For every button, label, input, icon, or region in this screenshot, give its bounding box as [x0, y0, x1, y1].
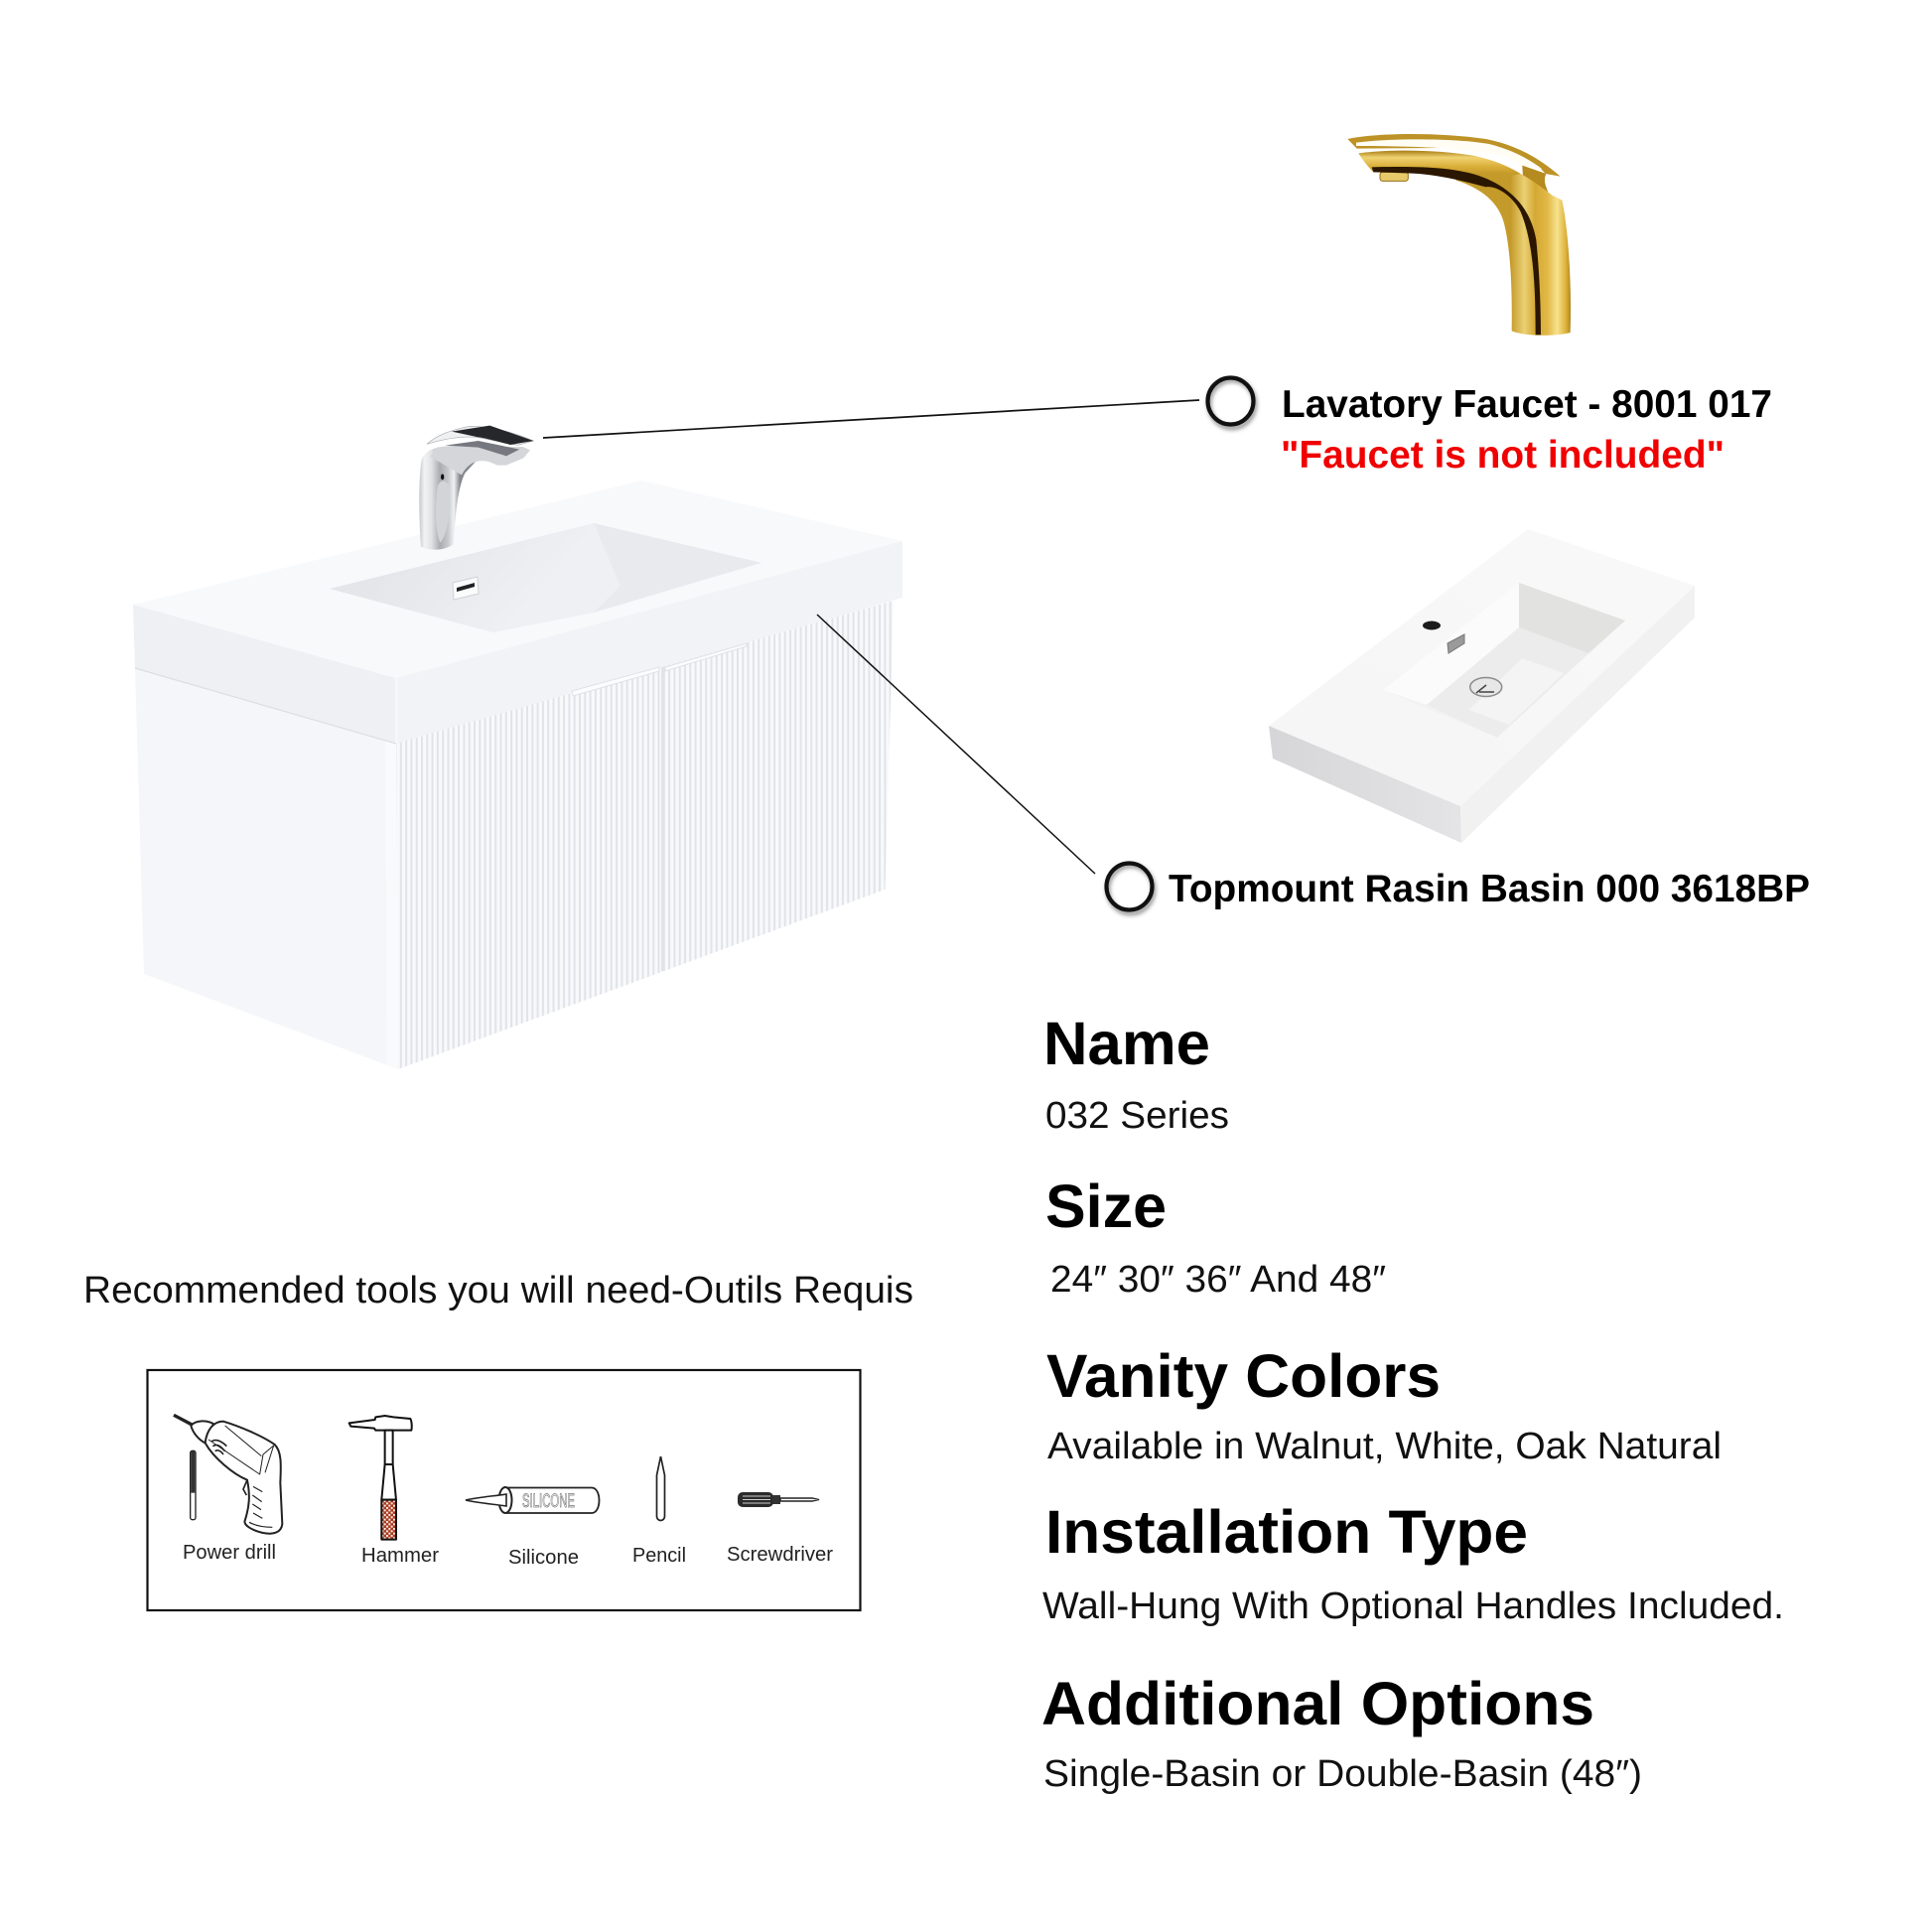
heading: installation type: Installation Type	[1045, 1498, 1528, 1566]
heading: vanity colors: Vanity Colors	[1046, 1342, 1441, 1410]
basin top overflow	[1448, 634, 1464, 653]
basin top product image	[1269, 529, 1695, 843]
tool: hammer	[349, 1416, 412, 1540]
silicone tube label: SILICONE	[522, 1491, 575, 1512]
vanity cabinet with basin top	[133, 481, 902, 1069]
countertop front face	[396, 541, 902, 744]
text: name value: 032 Series	[1045, 1094, 1229, 1137]
heading: name: Name	[1043, 1010, 1210, 1077]
cabinet ribbed drawer front	[396, 601, 894, 1069]
basin top surface	[1269, 529, 1695, 806]
gold faucet handle	[1347, 134, 1561, 177]
drawer pull handles	[572, 643, 747, 696]
basin top right edge	[1460, 586, 1695, 843]
tool label: silicone: Silicone	[508, 1547, 579, 1569]
label: lavatory faucet: Lavatory Faucet - 8001 017	[1282, 383, 1772, 426]
gold faucet column	[1456, 157, 1571, 336]
tool: silicone tube	[466, 1487, 600, 1513]
drill bit	[191, 1450, 196, 1520]
basin bowl	[330, 523, 761, 632]
basin top faucet hole	[1423, 621, 1441, 629]
cabinet side panel	[135, 668, 398, 1069]
heading: recommended tools: Recommended tools you will need-Outils Requis	[83, 1269, 913, 1311]
basin top left edge	[1269, 726, 1461, 843]
label: topmount basin: Topmount Rasin Basin 000 3618BP	[1169, 868, 1810, 910]
gold faucet spout	[1358, 151, 1521, 181]
panel: tools	[147, 1370, 860, 1610]
basin top bowl	[1383, 583, 1625, 738]
tool label: hammer: Hammer	[361, 1545, 439, 1567]
gold faucet product image	[1347, 134, 1571, 336]
tool label: pencil: Pencil	[632, 1545, 686, 1567]
label: faucet not included note: "Faucet is not included"	[1281, 434, 1725, 477]
tool label: power drill: Power drill	[183, 1542, 276, 1564]
tool: screwdriver	[738, 1492, 819, 1507]
chrome faucet	[419, 426, 533, 550]
callout marker: faucet	[1207, 377, 1255, 428]
countertop top surface	[133, 481, 902, 678]
text: additional options value: Single-Basin or Double-Basin (48″)	[1043, 1752, 1642, 1795]
basin top drain	[1470, 677, 1502, 697]
gold faucet neck	[1522, 166, 1548, 192]
text: installation type value: Wall-Hung With Optional Handles Included.	[1042, 1585, 1784, 1627]
text: vanity colors value: Available in Walnut, White, Oak Natural	[1047, 1425, 1722, 1467]
callout line: faucet	[543, 400, 1199, 438]
tools frame	[147, 1370, 860, 1610]
callout marker: basin	[1106, 864, 1154, 913]
gold faucet shadow strip	[1372, 167, 1541, 335]
callout line: basin	[817, 615, 1095, 874]
heading: size: Size	[1045, 1173, 1167, 1240]
countertop left face	[133, 605, 396, 744]
gold faucet aerator	[1380, 172, 1408, 181]
tool label: screwdriver: Screwdriver	[727, 1544, 833, 1566]
tool: power drill	[174, 1415, 282, 1534]
text: size value: 24″ 30″ 36″ And 48″	[1050, 1258, 1386, 1301]
tool: pencil	[657, 1456, 665, 1521]
basin overflow	[453, 577, 479, 600]
heading: additional options: Additional Options	[1041, 1670, 1594, 1737]
